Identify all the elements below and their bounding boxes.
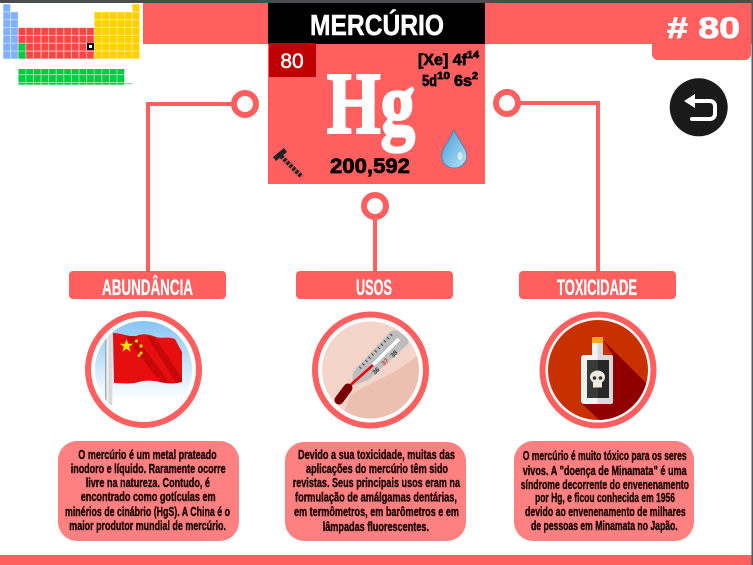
text block: abundância: inodoro e líquido. Raramente ocorre — [71, 462, 226, 476]
text block: usos — [285, 442, 466, 541]
tab: element number — [652, 12, 751, 60]
text block: toxicidade — [514, 441, 694, 541]
icon: screw — [273, 148, 302, 177]
text block: usos: lâmpadas fluorescentes. — [323, 520, 429, 534]
icon: back button — [670, 78, 728, 136]
atomic number: 80 — [280, 50, 304, 73]
electron configuration: 14 — [467, 50, 479, 61]
right page edge — [752, 0, 753, 565]
electron configuration: [Xe] 4f — [418, 52, 468, 69]
text block: abundância — [58, 441, 239, 541]
text block: usos: aplicações do mercúrio têm sido — [306, 462, 448, 476]
icon: thermometer: 37 — [380, 357, 391, 367]
connector lines — [148, 92, 598, 271]
footer bar — [0, 555, 752, 565]
electron configuration: 10 — [437, 71, 451, 82]
electron configuration: 6s — [454, 73, 472, 90]
electron configuration — [418, 50, 479, 90]
tab: element number: # 80 — [667, 12, 740, 45]
atomic mass: 200,592 — [330, 155, 410, 178]
electron configuration: 5d — [422, 73, 437, 90]
text block: abundância: encontrado como gotículas em — [81, 490, 216, 504]
heading: usos: USOS — [356, 275, 392, 300]
text block: usos: Devido a sua toxicidade, muitas das — [298, 448, 455, 462]
text block: abundância: livre na natureza. Contudo, é — [86, 476, 210, 490]
icon: thermometer — [315, 314, 426, 426]
heading: usos — [296, 271, 453, 300]
icon: water drop — [442, 130, 467, 168]
heading: toxicidade: TOXICIDADE — [557, 275, 637, 300]
icon: thermometer: 36 — [371, 366, 382, 376]
heading: abundância — [69, 271, 226, 300]
element name — [268, 3, 485, 44]
text block: usos: em termômetros, em barômetros e em — [294, 505, 459, 519]
element name: MERCÚRIO — [310, 8, 444, 42]
icon: thermometer: 38 — [389, 349, 400, 359]
atomic number — [269, 43, 316, 77]
element card — [268, 3, 485, 184]
text block: toxicidade: vivos. A "doença de Minamata" é uma — [523, 464, 687, 478]
text block: abundância: maior produtor mundial de mercúrio. — [69, 519, 226, 533]
electron configuration: 2 — [472, 71, 478, 82]
text block: usos: revistas. Seus principais usos eram na — [293, 476, 461, 490]
text block: usos: formulação de amálgamas dentárias, — [295, 490, 457, 504]
text block: abundância: O mercúrio é um metal prateado — [78, 448, 217, 462]
text block: toxicidade: devido ao envenenamento de milhares — [525, 505, 686, 519]
text block: abundância: minérios de cinábrio (HgS). A China é o — [65, 505, 230, 519]
text block: toxicidade: de pessoas em Minamata no Japão. — [531, 519, 678, 533]
icon: china flag — [88, 314, 199, 425]
periodic table mini map — [3, 4, 140, 85]
heading: abundância: ABUNDÂNCIA — [102, 275, 193, 300]
header band — [0, 0, 753, 44]
icon: poison bottle — [542, 314, 655, 430]
symbol: Hg — [327, 56, 415, 153]
heading: toxicidade — [519, 271, 676, 300]
text block: toxicidade: por Hg, e ficou conhecida em 1956 — [535, 491, 675, 505]
